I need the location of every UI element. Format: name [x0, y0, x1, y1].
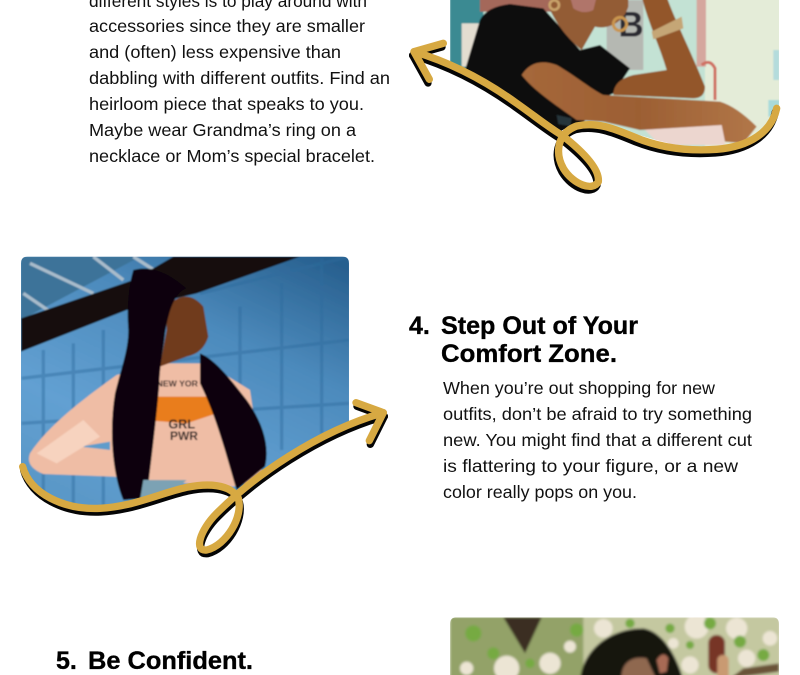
text block: tip 3 body: and (often) less expensive than — [89, 42, 341, 62]
text block: tip 3 body: accessories since they are smaller — [89, 16, 365, 36]
curved arrow: gold — [23, 403, 383, 550]
photo: woman in peach sweatshirt with curved gold arrow: GRL — [168, 417, 195, 431]
text block: tip 4 body: new. You might find that a different cut — [443, 430, 752, 450]
heading: tip 5: 5. — [56, 647, 77, 675]
heading: tip 5: Be Confident. — [88, 647, 253, 675]
text block: tip 4 body: outfits, don’t be afraid to try something — [443, 404, 752, 424]
curved arrow: gold — [414, 43, 777, 186]
text block: tip 4 body: color really pops on you. — [443, 482, 637, 502]
heading: tip 4: Comfort Zone. — [441, 340, 617, 368]
heading: tip 4 — [409, 312, 638, 368]
photo: woman in peach sweatshirt with curved gold arrow — [20, 255, 384, 554]
heading: tip 4: 4. — [409, 312, 430, 340]
text block: tip 4 body: is flattering to your figure, or a new — [443, 456, 738, 476]
photo: woman in black shirt with curved gold arrow: B — [618, 6, 644, 45]
photo: woman in peach sweatshirt with curved gold arrow: NEW YOR — [157, 379, 199, 389]
text block: tip 3 body: dabbling with different outfits. Find an — [89, 68, 390, 88]
heading: tip 4: Step Out of Your — [441, 312, 638, 340]
curved arrow: shadow — [413, 47, 775, 190]
text block: tip 4 body: When you’re out shopping for new — [443, 378, 715, 398]
text block: tip 3 body — [89, 0, 390, 166]
text block: tip 3 body: heirloom piece that speaks to you. — [89, 94, 364, 114]
text block: tip 3 body: Maybe wear Grandma’s ring on a — [89, 120, 356, 140]
text block: tip 3 body: necklace or Mom’s special bracelet. — [89, 146, 375, 166]
photo: woman in peach sweatshirt with curved gold arrow: PWR — [170, 429, 198, 443]
curved arrow: shadow — [24, 406, 384, 554]
text block: tip 4 body — [443, 378, 752, 502]
photo: woman among green foliage — [450, 615, 780, 675]
photo: woman in black shirt with curved gold arrow — [413, 0, 782, 190]
